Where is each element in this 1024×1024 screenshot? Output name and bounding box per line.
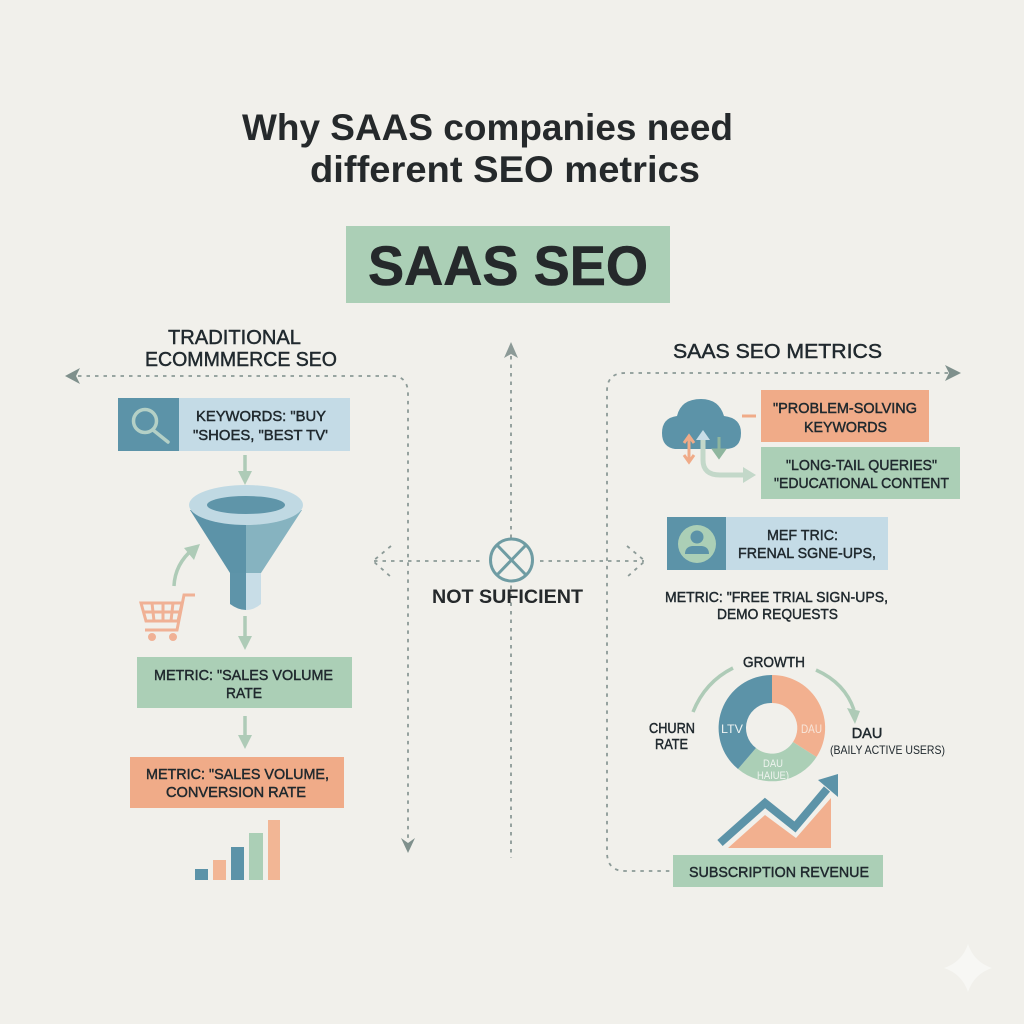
icon arrow: green down (714, 437, 724, 457)
chart: revenue growth area and arrow (720, 774, 838, 848)
panel: problem-solving keywords: KEYWORDS (804, 419, 887, 436)
panel: subscription revenue (673, 855, 883, 887)
text: free trial sign-ups metric: METRIC: "FREE TRIAL SIGN-UPS, (665, 589, 888, 606)
panel: subscription revenue: SUBSCRIPTION REVENUE (689, 864, 869, 881)
label: daily active users (830, 726, 945, 757)
arrow: not sufficient horizontal dashed axis (373, 546, 645, 577)
panel: problem-solving keywords (761, 390, 929, 442)
keywords text: KEYWORDS: "BUY (196, 408, 326, 425)
panel: sales volume conversion rate metric: CONVERSION RATE (166, 784, 306, 801)
arrow: metric to metric (238, 716, 252, 749)
label: churn rate (649, 721, 695, 753)
panel: sales volume rate metric (137, 657, 352, 708)
arrow: cart to funnel (174, 544, 200, 586)
title (242, 107, 733, 190)
icon: funnel (189, 485, 303, 610)
sign-ups text: FRENAL SGNE-UPS, (738, 545, 876, 562)
panel: sales volume conversion rate metric: METRIC: "SALES VOLUME, (146, 766, 329, 783)
panel: metric sign-ups box (667, 517, 888, 570)
text: free trial sign-ups metric (665, 589, 888, 623)
keywords text: "SHOES, "BEST TV' (193, 427, 328, 444)
panel: long-tail queries (761, 447, 960, 499)
donut chart: LTV (721, 722, 743, 736)
panel: keywords box (118, 398, 350, 451)
donut chart: DAU (763, 758, 783, 770)
panel: sales volume conversion rate metric (130, 757, 344, 808)
icon arrow: curved to queries (703, 438, 745, 475)
arrow: central vertical dashed axis (504, 342, 518, 858)
arrow: keywords to funnel (238, 455, 252, 485)
label: not sufficient: NOT SUFICIENT (432, 587, 583, 608)
central banner: SAAS SEO: SAAS SEO (368, 234, 648, 297)
heading: traditional ecommerce SEO: ECOMMMERCE SEO (145, 349, 337, 371)
panel: problem-solving keywords: "PROBLEM-SOLVING (773, 400, 917, 417)
donut chart: HAIUE) (757, 770, 789, 782)
label: growth: GROWTH (743, 654, 805, 671)
panel: long-tail queries: "LONG-TAIL QUERIES" (786, 457, 937, 474)
arrow: growth left arc (693, 668, 733, 712)
heading: SAAS SEO metrics: SAAS SEO METRICS (673, 341, 882, 363)
label: churn rate: CHURN (649, 721, 695, 737)
arrow: funnel to metric (238, 616, 252, 650)
icon arrow: orange double (684, 436, 694, 462)
panel: sales volume rate metric: METRIC: "SALES VOLUME (154, 667, 333, 684)
heading: traditional ecommerce SEO (145, 327, 337, 371)
icon: sparkle watermark (944, 944, 992, 992)
title: different SEO metrics (310, 149, 700, 190)
sign-ups text: MEF TRIC: (767, 527, 838, 544)
label: daily active users: (BAILY ACTIVE USERS) (830, 743, 945, 757)
icon: magnifying glass (134, 410, 168, 442)
title: Why SAAS companies need (242, 107, 733, 148)
icon: crossed circle (490, 539, 532, 581)
label: churn rate: RATE (655, 737, 688, 753)
label: daily active users: DAU (852, 726, 882, 742)
heading: traditional ecommerce SEO: TRADITIONAL (168, 327, 301, 349)
text: free trial sign-ups metric: DEMO REQUESTS (717, 606, 838, 623)
keywords text (193, 408, 328, 444)
arrow: growth right arc (816, 670, 860, 724)
donut chart (719, 675, 825, 782)
icon: user avatar (678, 525, 716, 563)
arrow: right column dashed bracket (607, 365, 961, 871)
arrow: left column dashed bracket (65, 368, 415, 853)
panel: sales volume rate metric: RATE (226, 685, 262, 702)
icon: cloud with arrows (662, 399, 756, 483)
bar chart (195, 820, 280, 880)
sign-ups text (738, 527, 876, 562)
icon: shopping cart (141, 595, 195, 640)
donut chart: DAU (801, 722, 822, 736)
panel: long-tail queries: "EDUCATIONAL CONTENT (774, 475, 949, 492)
icon dash: orange (742, 414, 756, 418)
